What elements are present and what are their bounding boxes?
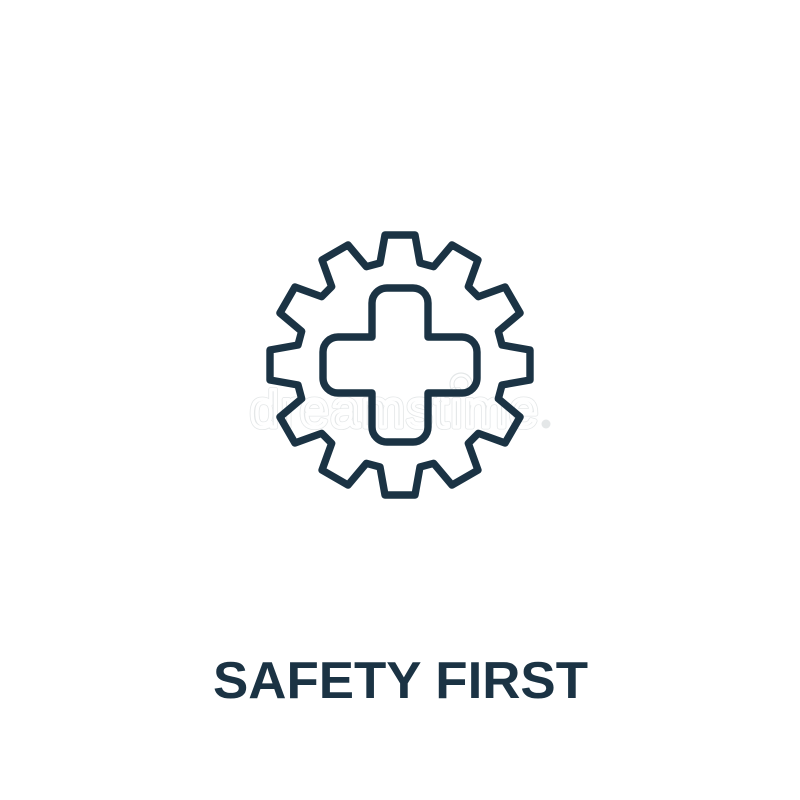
- watermark: dreamstime: [250, 381, 538, 439]
- gear outline: [270, 235, 530, 495]
- medical cross outline: [323, 288, 477, 442]
- icon: gear with medical cross: [270, 235, 530, 495]
- title: SAFETY FIRST: [213, 652, 588, 710]
- watermark: dreamstime: [250, 381, 538, 439]
